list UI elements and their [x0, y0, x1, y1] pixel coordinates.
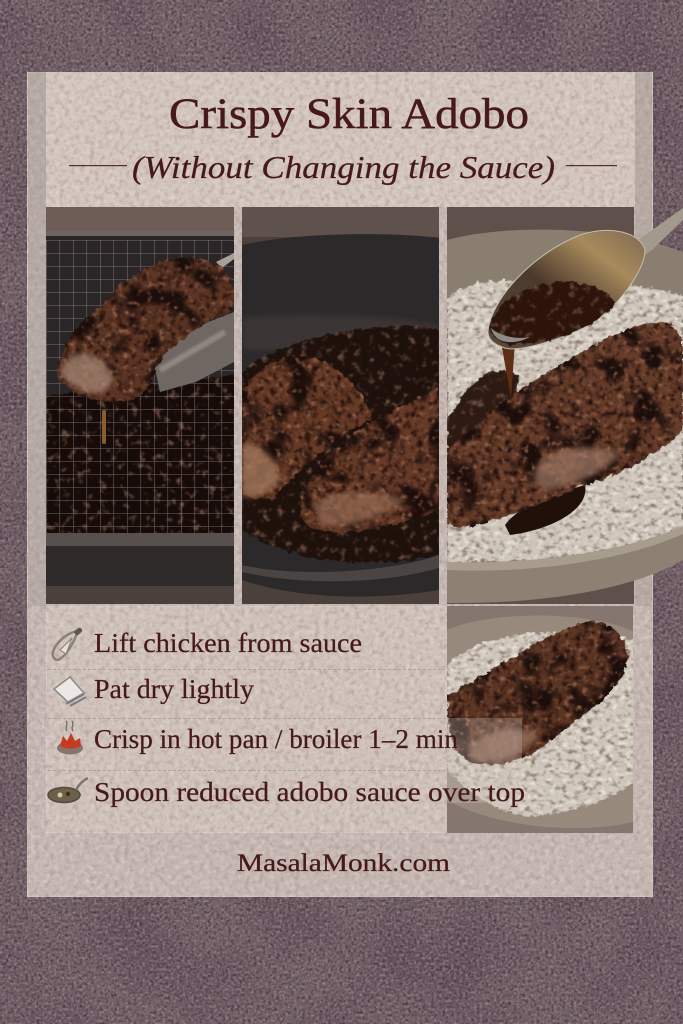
sauce in spoon: [490, 282, 613, 345]
bowl front rim highlight: [447, 526, 683, 571]
spoon bowl: [488, 230, 645, 349]
step divider lines: [48, 670, 445, 770]
inset photo: finished plated chicken: [447, 606, 640, 833]
panel: step list: [46, 606, 640, 833]
step 2: Pat dry lightly: [94, 674, 255, 704]
icon: tongs: [53, 627, 83, 660]
heading: title: Crispy Skin Adobo: [169, 91, 529, 138]
sauce drip: [502, 348, 514, 398]
step 4: Spoon reduced adobo sauce over top: [94, 777, 525, 807]
icon: spoon with sauce: [48, 778, 88, 802]
panel: title header: [46, 72, 635, 207]
icon: hot pan with flames: [57, 721, 83, 754]
step 3: Crisp in hot pan / broiler 1–2 min: [94, 724, 458, 754]
rice: [447, 281, 683, 562]
photo: chicken crisping in skillet: [242, 207, 439, 604]
photo backdrop: [447, 207, 634, 604]
card: outer paper panel: [27, 72, 653, 897]
chicken: [447, 322, 683, 527]
translucent fade where text crosses the inset photo: [447, 718, 522, 803]
step 1: Lift chicken from sauce: [94, 628, 362, 658]
photo: sauce spooned over chicken on rice: [447, 207, 683, 604]
subtitle with flanking rules: (Without Changing the Sauce): [132, 149, 555, 185]
photo: chicken lifted from sauce on wire rack: [46, 207, 234, 604]
card side strips, slightly darker: [28, 72, 652, 606]
bowl body: [447, 230, 683, 603]
icon: paper towel: [54, 677, 86, 706]
footer: website credit: MasalaMonk.com: [237, 850, 451, 877]
spoon handle: [639, 208, 683, 254]
